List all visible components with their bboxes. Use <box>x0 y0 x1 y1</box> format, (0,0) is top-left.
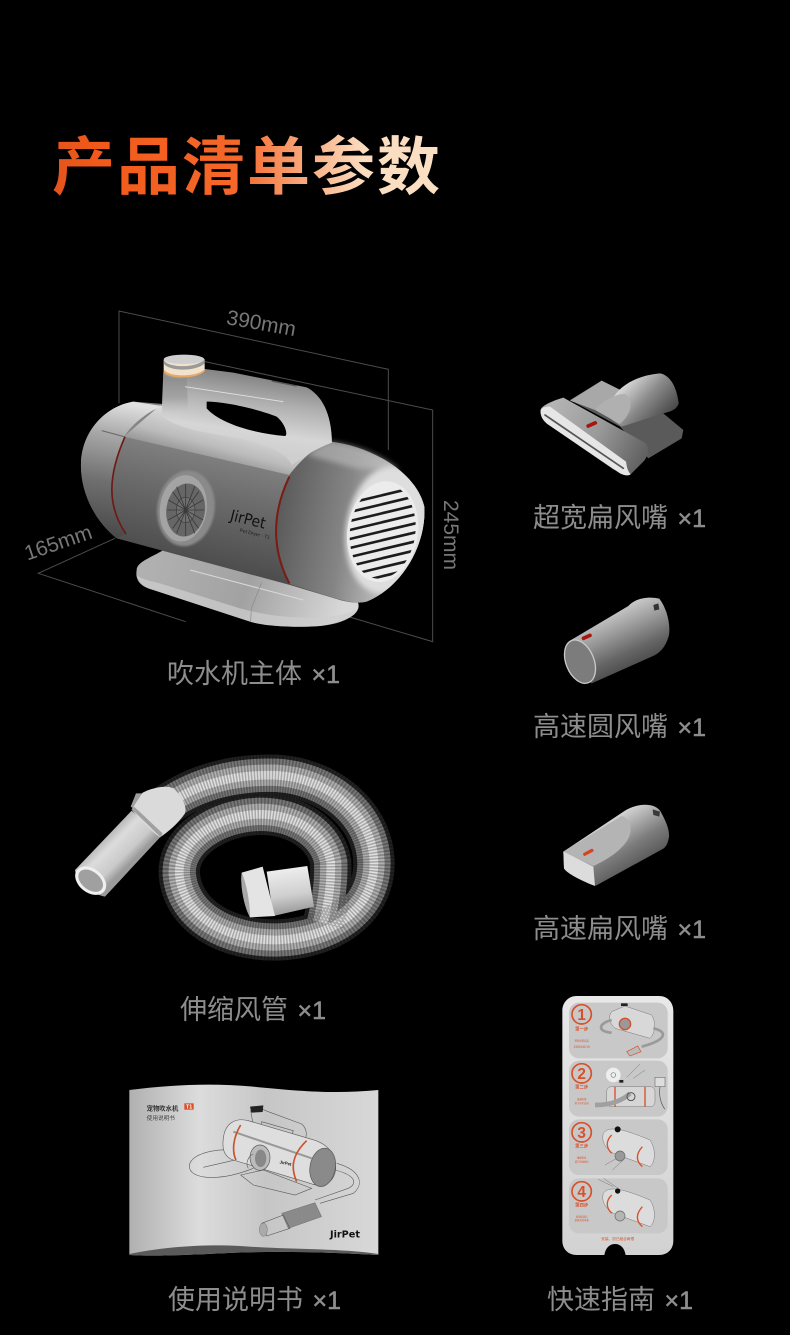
step 4 <box>569 1178 668 1233</box>
label: round nozzle: 高速圆风嘴 ×1 <box>533 712 706 742</box>
step 2: 第二步 <box>575 1084 589 1091</box>
step 2 <box>569 1061 668 1117</box>
model text: Pet Dryer · T1 <box>239 528 271 541</box>
red trim lines <box>112 437 289 583</box>
step 3: 调节风速档位 <box>575 1159 589 1163</box>
round nozzle <box>559 598 669 688</box>
step 4: 按键关闭电源 <box>575 1218 589 1222</box>
infographic canvas <box>25 134 706 1312</box>
step 2: 按下开关启动 <box>575 1101 589 1105</box>
T1 badge <box>184 1103 194 1111</box>
guide footer note: 安装、初已组合两根 <box>601 1236 634 1242</box>
dimension lines <box>38 311 433 642</box>
dryer base <box>136 550 359 627</box>
manual title: 宠物吹水机 <box>147 1104 179 1113</box>
label: quick guide: 快速指南 ×1 <box>547 1285 693 1315</box>
high-speed flat nozzle <box>563 805 669 886</box>
manual subtitle: 使用说明书 <box>147 1113 175 1122</box>
line drawing of dryer: JirPet <box>279 1159 292 1167</box>
dryer handle <box>162 355 332 465</box>
dimension label 390mm: 390mm <box>225 306 298 341</box>
label: main unit: 吹水机主体 ×1 <box>167 659 340 689</box>
step 4: 4 <box>577 1184 586 1201</box>
step 2: 接通电源 <box>577 1097 587 1101</box>
manual logo: JirPet <box>329 1229 360 1240</box>
telescopic hose <box>70 775 374 940</box>
dryer body <box>81 402 436 603</box>
red mark <box>583 848 594 856</box>
step 2: 2 <box>577 1066 586 1083</box>
step 1: 将吹风管安装 <box>575 1039 589 1043</box>
step 4: 使用结束后 <box>576 1214 588 1218</box>
top dial <box>164 355 205 377</box>
step 3: 3 <box>577 1125 586 1142</box>
brand logo: JirPet <box>227 506 268 533</box>
dimension label 165mm: 165mm <box>21 521 95 565</box>
step 3: 第三步 <box>575 1142 589 1149</box>
step 3: 根据毛发 <box>577 1156 587 1160</box>
step 1: 1 <box>577 1007 586 1024</box>
step 3 <box>569 1119 668 1175</box>
red mark <box>581 633 592 641</box>
side intake filter <box>152 467 220 550</box>
line drawing of dryer <box>189 1105 359 1236</box>
main dryer unit panel <box>21 306 462 642</box>
step 4: 第四步 <box>575 1201 589 1208</box>
step 1: 至机身进风口处 <box>574 1044 590 1048</box>
hose coil <box>167 775 374 940</box>
title: 产品清单参数 <box>52 117 442 208</box>
step 1: 第一步 <box>575 1026 589 1033</box>
T1 badge: T1 <box>186 1105 192 1111</box>
label: high-speed flat nozzle: 高速扁风嘴 ×1 <box>533 914 706 944</box>
label: manual: 使用说明书 ×1 <box>168 1285 341 1315</box>
hose cuff, wand end <box>70 787 186 901</box>
handle opening <box>207 402 286 436</box>
quick guide card <box>562 996 673 1255</box>
red mark <box>586 421 598 428</box>
label: hose: 伸缩风管 ×1 <box>180 995 326 1025</box>
step 1 <box>569 1003 668 1058</box>
dimension label 245mm: 245mm <box>439 500 462 570</box>
user manual booklet <box>129 1085 378 1256</box>
hose cuff, machine end <box>241 866 314 917</box>
rear air grille <box>347 482 418 582</box>
wide flat nozzle <box>541 373 683 475</box>
label: wide flat nozzle: 超宽扁风嘴 ×1 <box>533 503 706 533</box>
